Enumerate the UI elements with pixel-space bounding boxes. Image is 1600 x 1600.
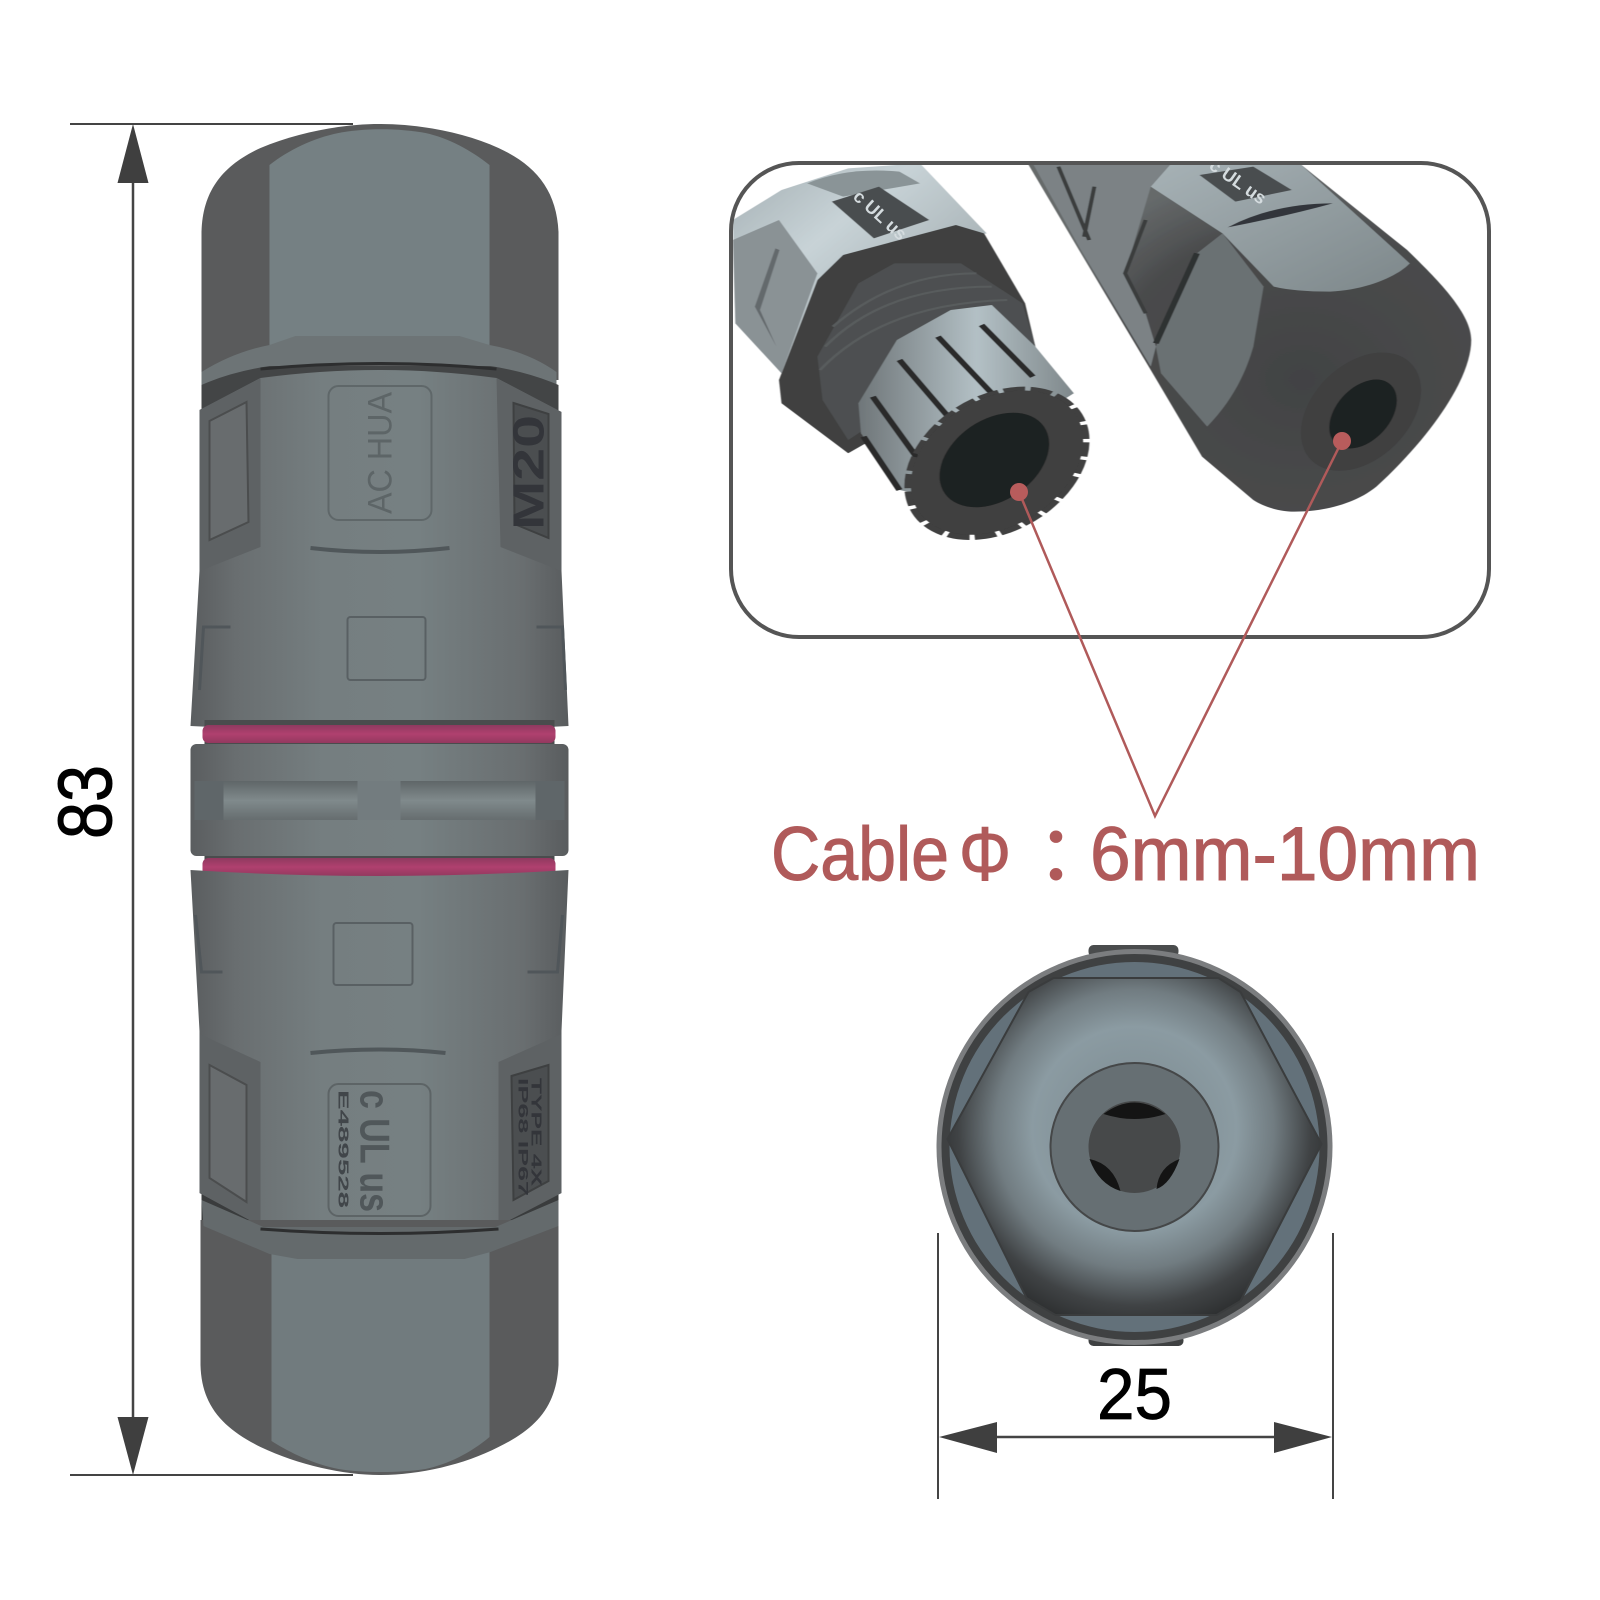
upper body: M20 bbox=[504, 415, 554, 530]
lower body: TYPE 4X bbox=[528, 1078, 544, 1186]
cable diameter label: ： bbox=[1018, 816, 1094, 901]
upper body bbox=[190, 364, 568, 731]
height dimension: 83: 83 bbox=[44, 765, 128, 839]
lower seal ring bbox=[202, 858, 556, 876]
connector side view bbox=[190, 124, 568, 1475]
backing behind seal rings bbox=[204, 720, 554, 880]
lower cap bbox=[200, 1200, 558, 1475]
height dimension: 83 bbox=[44, 124, 353, 1475]
panel: cable entry close-up bbox=[731, 155, 1489, 637]
upper seal ring bbox=[202, 725, 556, 743]
cable entry ring bbox=[1050, 1063, 1218, 1231]
left certification mark: c UL us bbox=[849, 186, 911, 244]
lower body: IP68 IP67 bbox=[516, 1078, 532, 1196]
lower body: c UL us bbox=[352, 1090, 398, 1212]
cable diameter label: Φ bbox=[959, 812, 1011, 897]
cable diameter label: 6mm-10mm bbox=[1090, 812, 1480, 897]
domed connector with cable hole bbox=[1028, 163, 1471, 512]
centre coupling bbox=[190, 744, 568, 856]
right certification mark: c UL us bbox=[1206, 155, 1270, 208]
lower body: E489528 bbox=[334, 1090, 352, 1208]
cable diameter label bbox=[771, 812, 1480, 901]
upper cap bbox=[202, 124, 558, 387]
inner bore with contacts bbox=[1088, 1101, 1180, 1193]
upper body: AC HUA bbox=[362, 392, 400, 514]
width dimension: 25: 25 bbox=[1097, 1355, 1172, 1435]
gland connector with collet bbox=[733, 165, 1090, 540]
width dimension: 25 bbox=[938, 1233, 1333, 1499]
callout lines to cable holes bbox=[1010, 432, 1351, 816]
connector end view bbox=[936, 945, 1332, 1346]
cable diameter label: Cable bbox=[771, 812, 949, 897]
hexagon dome bbox=[948, 978, 1322, 1315]
lower body bbox=[190, 870, 568, 1240]
